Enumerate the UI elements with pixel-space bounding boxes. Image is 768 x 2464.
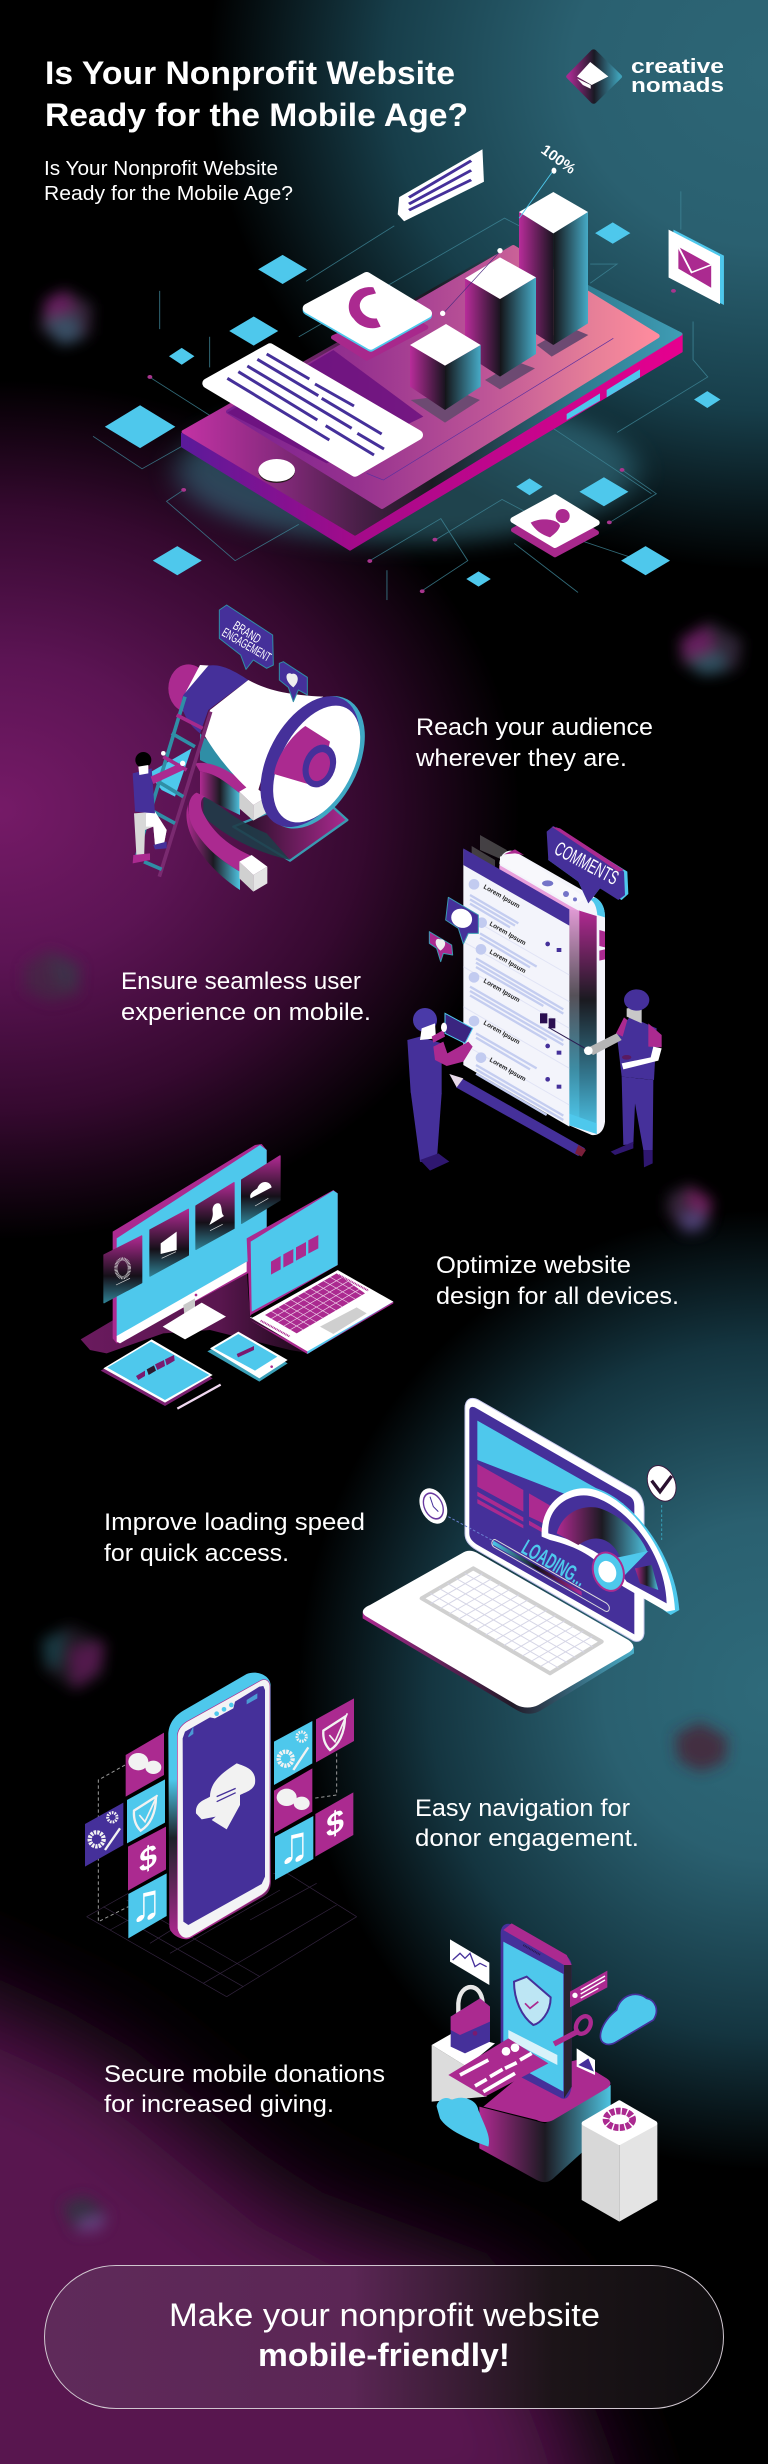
app tile glyphs: $ (139, 1836, 157, 1881)
security phone (501, 1923, 572, 2099)
text: reach your audience: Reach your audience (416, 714, 653, 741)
comment rows (463, 879, 569, 1120)
app tile glyphs: ♫ (278, 1819, 310, 1878)
desk shadow (81, 1270, 310, 1353)
screen inner line (367, 338, 613, 480)
text: secure donations: Secure mobile donations (104, 2061, 385, 2088)
app tile glyphs: ♫ (130, 1877, 162, 1936)
comments illustration (407, 826, 662, 1171)
magnet upper arm (195, 763, 251, 815)
subtitle (44, 158, 293, 205)
small chat bubbles (429, 897, 478, 962)
background: bottom magenta wash (0, 1960, 620, 2464)
devices illustration (81, 1144, 393, 1409)
megaphone band (182, 665, 248, 733)
heart bubble (279, 662, 307, 702)
100% label: 100% (538, 141, 579, 178)
left cloud (437, 2098, 489, 2147)
pointer and book icons (540, 1013, 585, 1048)
title: Is Your Nonprofit Website (45, 55, 455, 91)
call to action button (44, 2266, 724, 2408)
envelope card (669, 230, 724, 305)
call to action text: Make your nonprofit website (169, 2297, 600, 2333)
cyan diamonds (105, 222, 720, 587)
laptop screen frame (465, 1398, 644, 1641)
title: Ready for the Mobile Age? (45, 97, 468, 133)
translucent page layers (472, 835, 507, 867)
text: seamless user experience (121, 968, 371, 1026)
text: easy navigation: donor engagement. (415, 1825, 639, 1852)
comment row labels: Lorem Ipsum (482, 1020, 521, 1046)
gauge (542, 1487, 679, 1615)
text: optimize design: Optimize website (436, 1252, 631, 1279)
brand engagement bubble: BRAND (230, 618, 264, 646)
blurred floating cube: left lower (42, 1625, 105, 1690)
small phone (207, 1332, 288, 1382)
app tile glyphs (130, 1801, 344, 1936)
comment row labels: Lorem Ipsum (488, 921, 527, 947)
phone side (182, 334, 682, 550)
text: secure donations (104, 2061, 385, 2118)
hero illustration: isometric phone with charts (93, 141, 724, 600)
call to action bold text: mobile-friendly! (258, 2337, 510, 2373)
phone inner rim (177, 1680, 270, 1938)
person on ladder (133, 751, 185, 863)
floating cards (104, 1156, 280, 1303)
blurred floating cube: top left (40, 290, 92, 345)
purple shadow area (227, 350, 423, 463)
text: loading speed: for quick access. (104, 1540, 289, 1567)
right cloud (600, 1994, 656, 2044)
credit card (448, 2030, 557, 2097)
blurred floating cube: left middle (25, 950, 80, 1002)
logo (569, 52, 724, 101)
laptop screen (469, 1407, 634, 1634)
left person (407, 1008, 473, 1171)
text: loading speed (104, 1509, 365, 1567)
circuit nodes (147, 289, 676, 593)
magnet tips (239, 784, 267, 892)
logo: creative (631, 56, 724, 78)
brand engagement bubble (219, 605, 274, 669)
phone body (499, 849, 605, 1135)
dashed frame (98, 1753, 337, 1922)
right box (582, 2103, 657, 2222)
loading laptop illustration (363, 1398, 682, 1714)
base platform (233, 807, 347, 861)
progress bar (492, 1539, 609, 1612)
megaphone inner (255, 691, 378, 837)
phone top bezel (183, 247, 681, 534)
ladder (135, 697, 211, 877)
text: easy navigation (415, 1795, 639, 1852)
comments bubble (547, 826, 628, 903)
phone side buttons (567, 369, 640, 420)
subtitle: Is Your Nonprofit Website (44, 158, 278, 180)
bar chart (410, 192, 588, 423)
text: secure donations: for increased giving. (104, 2091, 334, 2118)
text: seamless user experience: Ensure seamless user (121, 968, 361, 995)
left block (432, 2033, 495, 2102)
app tiles right (274, 1698, 354, 1880)
screen banner (477, 1421, 624, 1504)
text: reach your audience: wherever they are. (415, 745, 627, 772)
megaphone rim (240, 679, 386, 846)
platform (479, 2060, 611, 2182)
text: easy navigation: Easy navigation for (415, 1795, 630, 1822)
home button (258, 459, 295, 483)
comment row labels: Lorem Ipsum (488, 949, 527, 975)
right person (583, 989, 662, 1167)
laptop base side (363, 1612, 634, 1714)
check icon (642, 1461, 682, 1540)
blurred floating cube: bottom left (62, 2196, 108, 2232)
brand engagement bubble: ENGAGEMENT (220, 625, 274, 665)
title (45, 55, 468, 133)
speech bubble (398, 149, 484, 221)
comment row labels: Lorem Ipsum (482, 978, 521, 1004)
comment panel (463, 848, 569, 1127)
blurred floating cube: upper right (680, 622, 742, 675)
key (554, 2014, 594, 2044)
text: seamless user experience: experience on mobile. (121, 999, 371, 1026)
app tiles left (85, 1733, 167, 1938)
phone body (168, 1673, 271, 1939)
floor grid (87, 1867, 357, 1997)
gear icon (606, 2111, 633, 2128)
monitor (113, 1144, 267, 1343)
comments bubble label: COMMENTS (551, 838, 622, 890)
phone screen (183, 1686, 265, 1925)
comment row labels (482, 884, 527, 1083)
loading label: LOADING... (518, 1535, 591, 1591)
laptop base (363, 1551, 633, 1707)
image card (577, 2048, 595, 2075)
tablet (101, 1339, 213, 1406)
phone notch (188, 1693, 257, 1737)
app phone illustration (85, 1673, 357, 1997)
stylus (177, 1385, 221, 1409)
megaphone illustration (133, 605, 386, 892)
cloud download icon (196, 1763, 255, 1829)
chart card (450, 1939, 489, 1985)
phone glow (176, 398, 637, 543)
blurred floating cube: right middle (668, 1185, 712, 1232)
padlock (451, 1987, 490, 2053)
app tile glyphs: $ (326, 1801, 344, 1846)
magnet lower arm (186, 793, 290, 890)
clock icon (414, 1484, 492, 1540)
screen blocks (477, 1464, 553, 1533)
gauge needle (586, 1547, 648, 1597)
megaphone rear (168, 664, 210, 712)
comment row labels: Lorem Ipsum (482, 884, 521, 910)
circuit lines (93, 191, 708, 600)
text: reach your audience (415, 714, 653, 772)
chart leader line (519, 168, 556, 218)
subtitle: Ready for the Mobile Age? (44, 183, 293, 205)
message card (570, 1971, 607, 2007)
megaphone cone (203, 680, 323, 797)
call card (307, 277, 427, 358)
pencil (449, 1074, 586, 1157)
text card (207, 348, 418, 472)
security illustration (432, 1923, 657, 2222)
phone screen (228, 247, 657, 507)
text: optimize design: design for all devices. (436, 1283, 679, 1310)
megaphone centre (297, 740, 342, 792)
logo: nomads (631, 75, 724, 97)
keyboard (422, 1568, 602, 1673)
magnet stem (200, 733, 253, 788)
laptop (247, 1190, 393, 1354)
user card (513, 497, 597, 555)
blurred floating cube: right lower (675, 1722, 728, 1772)
text: optimize design (436, 1252, 679, 1310)
ladder back panel (148, 748, 192, 797)
comment row labels: Lorem Ipsum (488, 1057, 527, 1083)
text: loading speed: Improve loading speed (104, 1509, 365, 1536)
